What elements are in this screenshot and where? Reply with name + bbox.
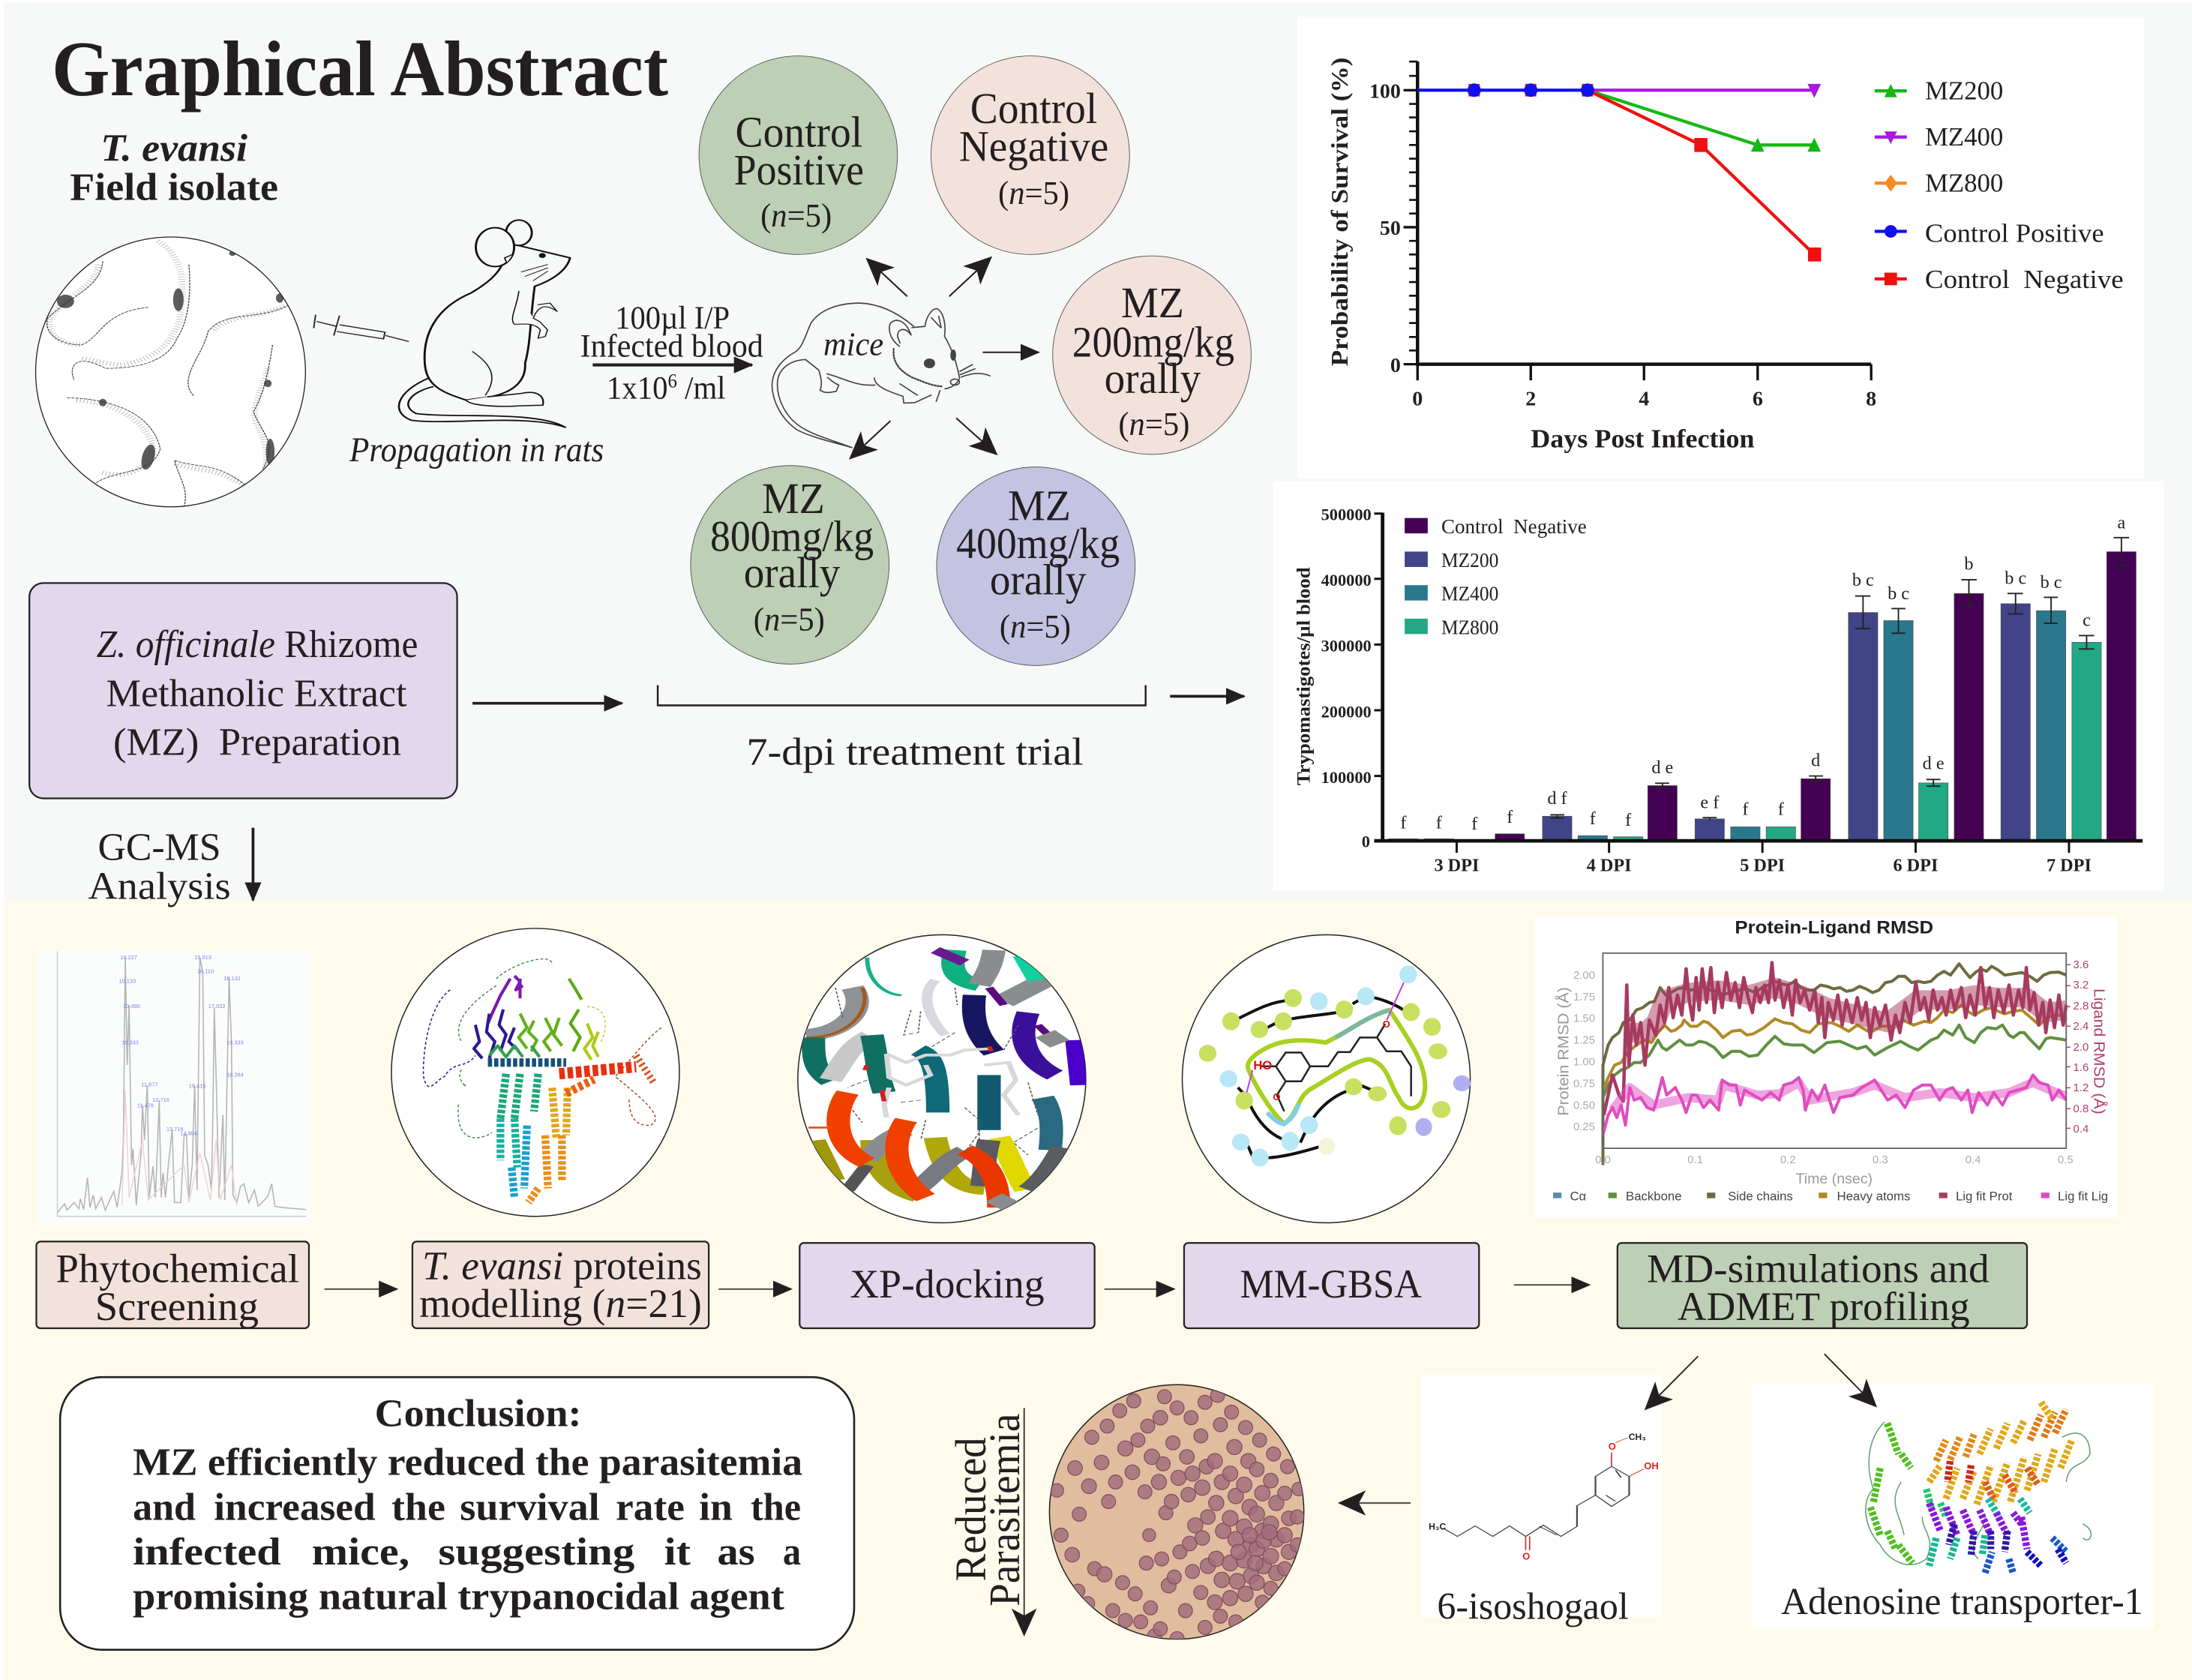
panel: survival chart [1297,16,2145,478]
survival axis tick labels: 2 [1525,388,1536,411]
bar significance letters: b [1964,554,1974,574]
bar significance letters: f [1507,807,1513,827]
conclusion line 2: in [699,1485,733,1528]
chromatogram peak labels [118,954,244,1137]
conclusion line 3: suggesting [438,1530,634,1574]
RMSD right axis labels: 1.2 [2074,1082,2089,1094]
box: phytochemical screening: Screening [95,1284,259,1329]
icon: mouse [772,303,990,448]
group: control negative: Negative [959,123,1108,170]
group: MZ 800: orally [744,550,840,597]
arrow: modelling to docking [718,1288,791,1290]
box: XP-docking: XP-docking [850,1262,1045,1306]
chromatogram peak labels: 15.913 [194,954,211,961]
box: extract preparation: (MZ) Preparation [113,721,401,764]
illustration: blood smear circle [1047,1384,1306,1646]
RMSD left axis labels: 1.00 [1573,1057,1595,1069]
bars [1389,552,2136,841]
ligand atoms: O [1273,1091,1280,1102]
illustration: protein model circle [391,928,679,1216]
bar chart tick labels: 0 [1362,832,1370,851]
box: extract preparation: Z. officinale Rhizome [97,622,418,666]
bracket: treatment trial [658,685,1146,705]
group: control positive: (n=5) [760,196,832,234]
chromatogram peak labels: 14.804 [180,1130,197,1137]
box: extract preparation: Methanolic Extract [106,671,407,715]
conclusion line 2: the [391,1485,445,1528]
label: GC-MS analysis: Analysis [88,865,231,908]
survival axis titles: Days Post Infection [1531,424,1755,454]
RMSD legend: Side chains [1728,1189,1793,1203]
box: conclusion: promising natural trypanocidal agent [133,1575,784,1618]
RMSD right axis labels: Ligand RMSD (Å) [2091,988,2108,1114]
icon: syringe [313,315,409,341]
RMSD right axis labels: 0.4 [2074,1124,2089,1136]
conclusion line 2: the [751,1485,801,1528]
bar significance letters: d e [1651,758,1673,778]
RMSD plot frame [1603,953,2071,1148]
arrow: reduced parasitemia [1024,1408,1025,1635]
bar significance letters: b c [2005,568,2026,588]
bar chart tick labels: 4 DPI [1587,855,1632,875]
RMSD title: Protein-Ligand RMSD [1735,917,1933,938]
survival legend: Control Positive [1925,218,2104,248]
bar chart legend: MZ200 [1441,549,1498,572]
RMSD x axis [1595,1154,2074,1187]
survival axis tick labels: 8 [1866,388,1876,411]
RMSD left axis labels: 1.50 [1573,1013,1595,1025]
survival legend: MZ200 [1925,75,2003,105]
arrow: trial to charts [1170,695,1244,697]
conclusion line 3 [133,1530,801,1574]
molecule atom labels [1429,1432,1659,1562]
bar significance letters: b c [1888,584,1909,604]
conclusion line 3: a [783,1530,801,1574]
molecule atom labels: H₃C [1429,1521,1447,1532]
illustration: docking circle [798,934,1086,1222]
text: infection dose [580,301,763,406]
conclusion line 2: survival [460,1485,600,1528]
chromatogram peak labels: 18.264 [226,1071,244,1078]
heading: T. evansi field isolate: Field isolate [70,166,278,209]
label: GC-MS analysis [88,825,231,908]
bar significance letters: f [1436,812,1443,832]
group: MZ 200: 200mg/kg [1072,319,1234,366]
group: MZ 400 [937,467,1135,665]
conclusion line 3: mice, [312,1530,409,1574]
illustration: ligand interaction circle [1183,934,1471,1222]
top domain helices [474,976,598,1063]
survival axis tick labels: 0 [1390,354,1401,377]
RMSD right axis labels: 2.8 [2074,1000,2089,1012]
box: extract preparation [29,583,457,798]
bar chart legend: MZ800 [1441,616,1498,638]
box: conclusion: Conclusion: [375,1391,581,1435]
residues green [1199,989,1450,1136]
bar chart axes [1374,513,2143,853]
arrow: extract to trial [472,703,622,704]
icon: rat [399,220,570,428]
panel: adenosine transporter [1752,1384,2155,1629]
conclusion line 2 [133,1485,801,1528]
interaction lines [835,988,1042,1155]
RMSD legend [1553,1189,2108,1203]
group: MZ 400: MZ [1008,482,1071,530]
chromatogram peak labels: 17.022 [208,1003,226,1010]
RMSD right axis labels: 3.2 [2074,980,2089,992]
box: MD simulations and ADMET: MD-simulations and [1647,1246,1990,1291]
label: GC-MS analysis: GC-MS [97,825,221,868]
box: MD simulations and ADMET: ADMET profiling [1678,1284,1970,1329]
bar significance letters [1400,512,2125,834]
conclusion line 3: as [717,1530,755,1574]
chromatogram peak labels: 18.333 [226,1040,244,1046]
bar significance letters: f [1625,810,1632,830]
RMSD right axis labels: 0.8 [2074,1103,2089,1115]
chromatogram peak labels: 12.716 [152,1096,169,1103]
survival axis titles [1327,57,1755,454]
RMSD x axis: 0.2 [1780,1154,1796,1166]
conclusion line 3: it [664,1530,691,1574]
bar significance letters: b c [1852,570,1874,590]
survival legend: MZ400 [1925,122,2003,152]
chromatogram peak labels: 11.877 [141,1081,157,1088]
bar chart tick labels: 100000 [1321,768,1372,787]
survival markers [1468,83,1821,262]
conclusion line 3: infected [133,1530,281,1574]
text: infection dose: Infected blood [580,328,763,364]
RMSD right axis labels: 2.0 [2074,1042,2089,1054]
chromatogram peak labels: 11.478 [137,1102,154,1108]
bar chart tick labels: 200000 [1321,702,1372,721]
bar chart legend: Control Negative [1441,515,1587,538]
transmembrane helices [500,1074,568,1202]
bar significance letters: c [2083,610,2091,631]
arrow: dose to mice [592,364,752,366]
arrow: molecule to smear [1339,1502,1411,1504]
bar chart tick labels: Trypomastigotes/µl blood [1294,567,1315,785]
survival axis titles: Probability of Survival (%) [1327,57,1353,366]
bar chart tick labels: 7 DPI [2047,855,2092,875]
arrow: MM-GBSA to MD [1514,1284,1590,1286]
RMSD left axis labels [1555,970,1595,1133]
group: MZ 800 [691,466,889,664]
text: infection dose: /ml [677,370,726,406]
ligand atoms [1253,1018,1390,1102]
panel: 6-isoshogaol structure [1421,1376,1662,1628]
ligand skeleton [1260,1024,1411,1112]
bar significance letters: d f [1547,788,1568,808]
bar significance letters: a [2117,512,2125,532]
arrow: docking to MM-GBSA [1105,1288,1174,1290]
box: XP-docking [799,1243,1095,1328]
survival axis tick labels: 50 [1380,217,1401,240]
RMSD left axis labels: Protein RMSD (Å) [1555,987,1573,1116]
RMSD left axis labels: 0.50 [1573,1100,1595,1112]
ligand atoms: HO [1253,1058,1272,1072]
RMSD left axis labels: 1.75 [1573,992,1595,1004]
group: MZ 800: 800mg/kg [710,513,874,560]
box: conclusion: MZ efficiently reduced the parasitemia [133,1441,802,1484]
group: MZ 200: orally [1105,356,1201,403]
conclusion line 2: rate [616,1485,685,1528]
RMSD x axis: 0.0 [1595,1154,1611,1166]
text: infection dose: 1x10 [607,370,671,406]
box: MM-GBSA: MM-GBSA [1240,1262,1422,1306]
box: T. evansi proteins modelling: modelling (n=21) [419,1281,702,1326]
RMSD right axis labels: 1.6 [2074,1062,2089,1074]
molecule atom labels: O [1522,1550,1530,1562]
group: control positive: Positive [734,147,864,194]
RMSD x axis: 0.3 [1873,1154,1888,1166]
RMSD legend: Cα [1570,1189,1587,1203]
bar chart tick labels: 500000 [1321,505,1372,524]
conclusion line 2: and [133,1485,196,1528]
chromatogram peak labels: 10.133 [118,978,136,985]
heading: T. evansi field isolate [70,126,278,209]
panel: RMSD chart [1535,916,2117,1218]
RMSD left axis labels: 0.25 [1573,1121,1595,1133]
molecule skeleton [1443,1438,1644,1550]
panel: parasitemia bar chart [1273,481,2164,890]
RMSD right axis labels: 2.4 [2074,1021,2089,1033]
bar significance letters: b c [2041,572,2062,592]
group: MZ 200: MZ [1121,280,1184,327]
illustration: trypanosomes in a circle [36,237,305,507]
arrows: mice to treatment groups [850,257,1039,458]
arrow: screening to modelling [324,1288,397,1290]
RMSD right axis labels [2074,959,2108,1136]
RMSD legend: Heavy atoms [1837,1189,1910,1203]
bar chart tick labels: 400000 [1321,571,1372,590]
survival axis tick labels: 0 [1412,388,1423,411]
label: adenosine transporter-1: Adenosine transporter-1 [1781,1580,2143,1622]
bar chart tick labels: 300000 [1321,637,1372,656]
chromatogram peak labels: 10.333 [121,1040,139,1046]
group: MZ 800: (n=5) [754,601,825,638]
bar chart legend: MZ400 [1441,583,1498,605]
box: conclusion [60,1377,854,1650]
RMSD legend: Lig fit Prot [1956,1189,2013,1203]
chromatogram peak labels: 16.110 [197,968,214,974]
group: MZ 400: 400mg/kg [956,520,1120,568]
RMSD left axis labels: 2.00 [1573,970,1595,982]
chromatogram trace [58,951,306,1216]
group: control positive: Control [736,110,862,157]
heading: T. evansi field isolate: T. evansi [100,126,247,170]
survival axis tick labels: 4 [1639,388,1649,411]
background: top section [4,3,2192,899]
box: MD simulations and ADMET [1618,1243,2027,1329]
bar chart tick labels: 5 DPI [1740,855,1785,875]
title: Graphical Abstract [52,26,668,112]
label: reduced parasitemia: Parasitemia [982,1414,1029,1606]
pocket contour [1248,1010,1425,1124]
bar significance letters: f [1778,799,1785,819]
chromatogram peak labels: 10.490 [123,1003,140,1010]
background: bottom section [4,899,2192,1680]
RMSD legend: Backbone [1626,1189,1682,1203]
residues other [1318,1076,1471,1155]
ligand sticks [884,1048,1018,1118]
molecule atom labels: OH [1644,1460,1659,1472]
bar significance letters: e f [1700,792,1720,812]
box: phytochemical screening: Phytochemical [56,1246,299,1291]
ligand atoms: O [1383,1018,1390,1030]
chart axes [1404,62,1871,380]
survival axis tick labels: 100 [1369,80,1401,104]
panel: GC-MS chromatogram [37,951,310,1223]
molecule atom labels: CH₃ [1629,1432,1646,1442]
survival axis tick labels [1369,80,1876,411]
group: control negative [931,56,1129,254]
RMSD left axis labels: 0.75 [1573,1078,1595,1090]
RMSD x axis: Time (nsec) [1796,1171,1873,1187]
label: reduced parasitemia [948,1414,1029,1606]
group: control negative: Control [970,86,1097,133]
survival axis tick labels: 6 [1753,388,1763,411]
bar significance letters: f [1742,799,1749,819]
bar significance letters: d e [1923,754,1945,774]
group: MZ 400: orally [990,556,1087,604]
group: control positive [699,56,898,254]
label: propagation in rats: Propagation in rats [349,430,604,470]
group: MZ 800: MZ [762,476,825,523]
bar significance letters: f [1471,814,1478,834]
chromatogram peak labels: 10.227 [120,954,137,961]
chromatogram peak labels: 13.716 [166,1126,184,1132]
group: MZ 400: (n=5) [1000,608,1071,645]
arrows: MD to molecule and transporter [1645,1354,1876,1409]
bar significance letters: d [1811,751,1820,771]
group: MZ 200 [1053,256,1251,454]
group: MZ 200: (n=5) [1118,405,1189,442]
bar chart tick labels [1294,505,2092,875]
residues blue [1220,965,1417,1166]
group: control negative: (n=5) [998,174,1069,212]
box: MM-GBSA [1184,1243,1479,1328]
label: 7-dpi treatment trial: 7-dpi treatment trial [746,730,1084,774]
error bars [1550,538,2129,820]
bar chart legend [1405,515,1587,638]
RMSD x axis: 0.5 [2058,1154,2074,1166]
label: reduced parasitemia: Reduced [948,1437,995,1581]
chromatogram peak labels: 18.131 [223,975,241,982]
text: infection dose: 6 [668,370,677,392]
residue chains [1238,996,1404,1158]
arrow: GC-MS down [252,828,253,901]
bar chart tick labels: 3 DPI [1435,855,1479,875]
conclusion line 2: increased [214,1485,376,1528]
bar significance letters: f [1400,812,1407,832]
survival lines [1417,90,1814,254]
bar chart tick labels: 6 DPI [1894,855,1938,875]
RMSD x axis: 0.1 [1687,1154,1703,1166]
box: T. evansi proteins modelling [412,1241,709,1328]
label: 6-isoshogaol: 6-isoshogaol [1437,1586,1629,1628]
survival legend [1875,75,2124,294]
text: infection dose: 100µl I/P [615,301,730,336]
box: phytochemical screening [36,1241,309,1329]
survival legend: Control Negative [1925,264,2124,294]
RMSD x axis: 0.4 [1966,1154,1981,1166]
label: mice: mice [823,326,883,363]
RMSD traces [1603,962,2066,1165]
RMSD left axis labels: 1.25 [1573,1035,1595,1047]
survival legend: MZ800 [1925,167,2003,197]
chromatogram peak labels: 15.415 [189,1082,205,1089]
loops [424,959,661,1138]
RMSD legend: Lig fit Lig [2058,1189,2108,1203]
box: T. evansi proteins modelling: T. evansi proteins [422,1244,702,1288]
RMSD right axis labels: 3.6 [2074,959,2089,971]
protein ribbon [1866,1402,2091,1573]
molecule atom labels: O [1609,1441,1616,1452]
bar significance letters: f [1590,808,1597,829]
